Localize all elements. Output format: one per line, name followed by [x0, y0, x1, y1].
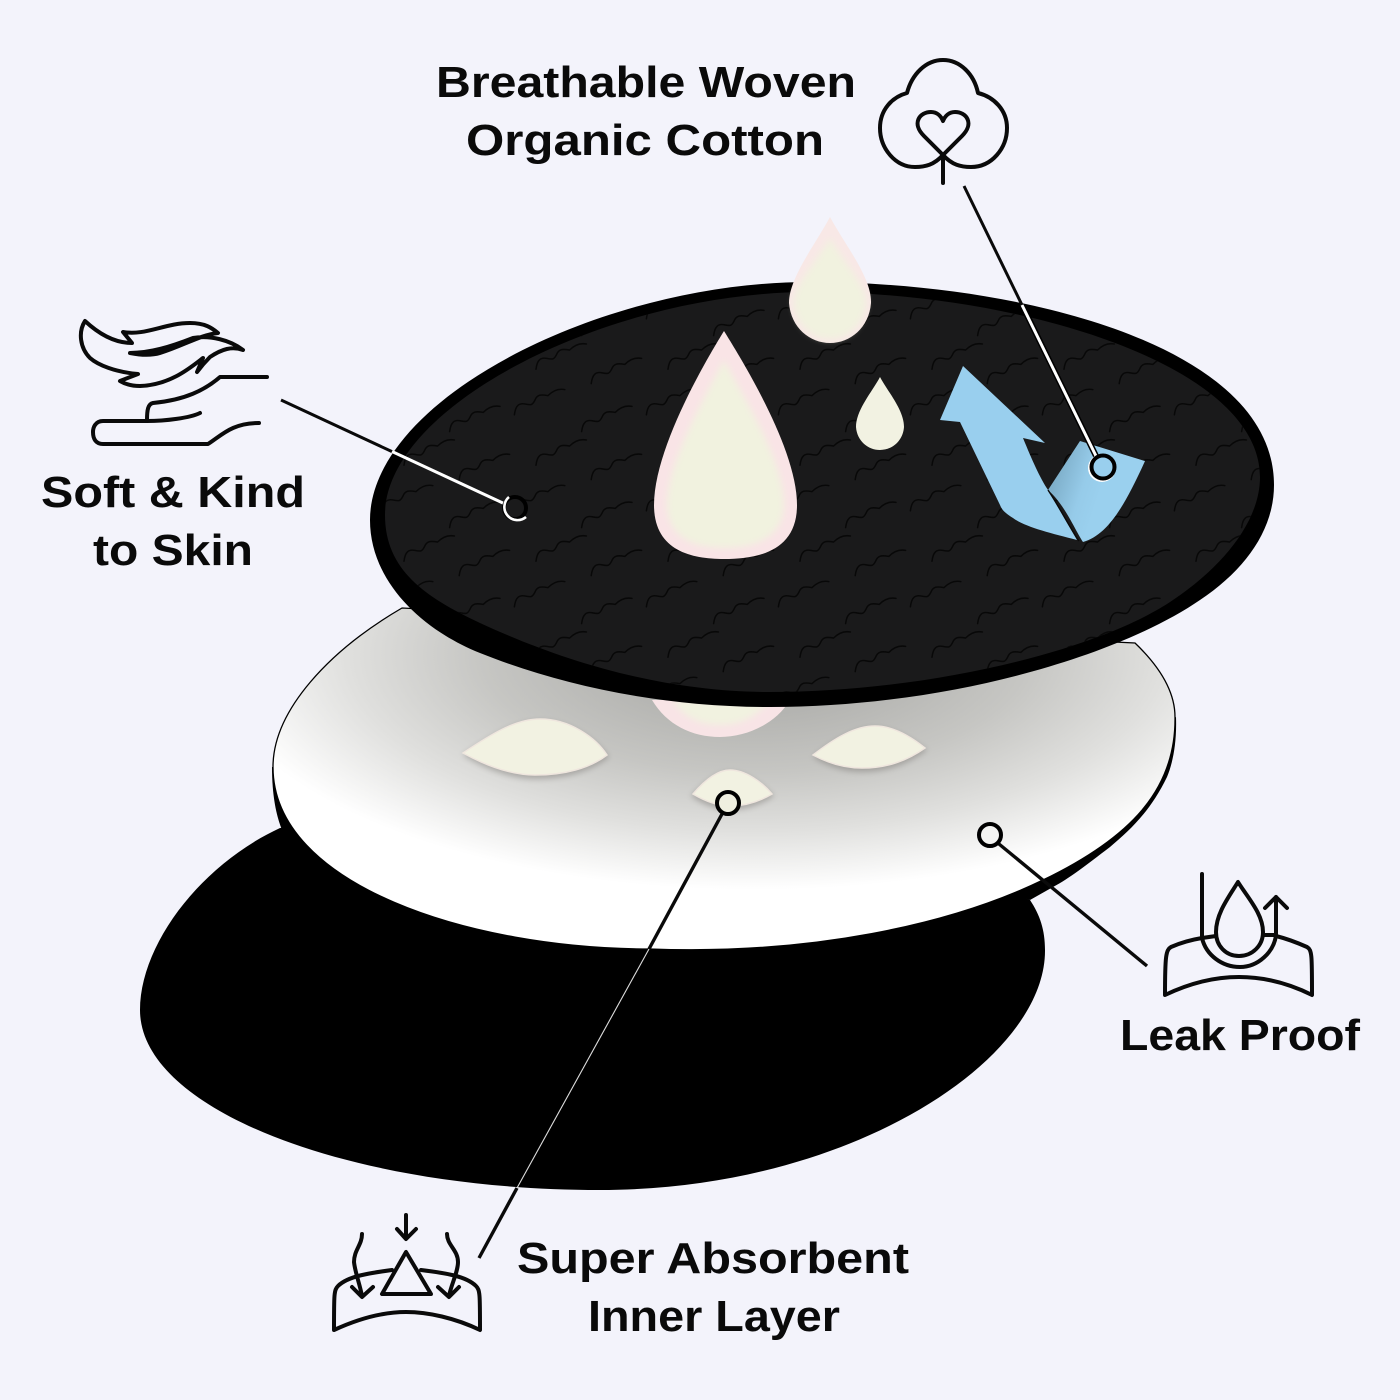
- callout: Leak Proof: [979, 824, 1360, 1060]
- splash shadows: [463, 721, 927, 810]
- drop: top: [789, 217, 871, 343]
- callout: Super Absorbent Inner Layer: [334, 792, 909, 1341]
- icon: absorbent layer: [334, 1215, 480, 1330]
- callout: Breathable Woven Organic Cotton: [436, 58, 1116, 482]
- heading: Breathable Woven Organic Cotton: Breathable Woven: [436, 58, 856, 107]
- bottom layer: black disc: [140, 800, 1045, 1190]
- heading: Super Absorbent Inner Layer: [517, 1234, 909, 1341]
- heading: Soft & Kind to Skin: [41, 468, 305, 575]
- drop: large: [654, 331, 797, 559]
- leader line: [979, 824, 1147, 966]
- droplet splash shapes: [463, 700, 927, 810]
- heading: Breathable Woven Organic Cotton: Organic Cotton: [466, 116, 824, 165]
- icon: leak proof drop: [1165, 874, 1312, 995]
- leader line: [479, 792, 739, 1258]
- drop: small: [856, 377, 904, 450]
- heading: Breathable Woven Organic Cotton: [436, 58, 856, 165]
- heading: Soft & Kind to Skin: Soft & Kind: [41, 468, 305, 517]
- water drops: [654, 217, 904, 559]
- callout: Soft & Kind to Skin: [41, 321, 526, 575]
- heading: Super Absorbent Inner Layer: Inner Layer: [588, 1292, 840, 1341]
- top layer: woven black disc: [370, 282, 1274, 707]
- heading: Leak Proof: Leak Proof: [1120, 1011, 1360, 1060]
- leader line: [281, 400, 526, 520]
- leader line: [964, 186, 1116, 482]
- heading: Soft & Kind to Skin: to Skin: [93, 526, 253, 575]
- heading: Super Absorbent Inner Layer: Super Absorbent: [517, 1234, 909, 1283]
- blue folded arrow: [940, 366, 1145, 542]
- icon: feather on hand: [81, 321, 267, 444]
- icon: cotton: [880, 60, 1007, 183]
- middle layer: white disc: [272, 608, 1176, 950]
